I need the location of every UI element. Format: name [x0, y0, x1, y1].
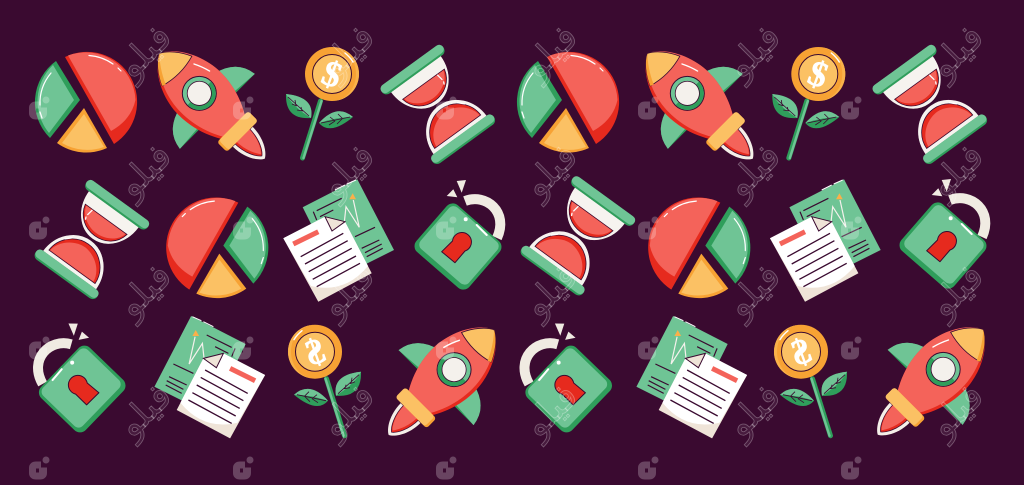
- watermark: repeated wordmark: فيلو: [311, 17, 383, 89]
- icon: documents, row 3: [154, 316, 265, 438]
- icon: coin flower, row 3: [288, 325, 361, 436]
- watermark: repeated wordmark: فيلو: [920, 136, 992, 208]
- watermark: repeated wordmark: فيلو: [920, 256, 992, 328]
- watermark: repeated wordmark: فيلو: [514, 376, 586, 448]
- watermark: repeated wordmark: فيلو: [311, 136, 383, 208]
- icon: hourglass 2, row 2: [518, 174, 637, 298]
- watermark: repeated wordmark: فيلو: [920, 17, 992, 89]
- icon: coin flower, row 1: [286, 47, 359, 158]
- watermark: repeated wordmark: فيلو: [514, 136, 586, 208]
- watermark: repeated logo marks: [32, 96, 862, 476]
- icon: rocket 2, row 3: [840, 292, 1021, 472]
- watermark: repeated wordmark: فيلو: [717, 376, 789, 448]
- watermark: repeated wordmark: فيلو: [108, 136, 180, 208]
- watermark: repeated wordmark: فيلو: [717, 17, 789, 89]
- icon: pie chart, row 2: [166, 197, 268, 298]
- icon: pie chart, row 1: [35, 52, 137, 152]
- icon: pie chart 2, row 2: [648, 197, 750, 298]
- icon: hourglass 2, row 1: [871, 43, 989, 166]
- icon: documents 2, row 3: [636, 316, 747, 438]
- watermark: repeated wordmark: فيلو: [108, 376, 180, 448]
- watermark: repeated wordmark: فيلو: [514, 17, 586, 89]
- icon: hourglass, row 1: [379, 43, 497, 166]
- icon: open padlock, row 3: [30, 319, 133, 439]
- icon: open padlock 2, row 3: [516, 319, 619, 439]
- icon: coin flower 2, row 1: [772, 47, 845, 158]
- watermark: repeated wordmark: فيلو: [717, 136, 789, 208]
- icon: open padlock, row 2: [411, 180, 505, 293]
- watermark: repeated wordmark: فيلو: [311, 376, 383, 448]
- watermark: repeated wordmark: فيلو: [717, 256, 789, 328]
- icon: open padlock 2, row 2: [896, 179, 990, 292]
- icon: hourglass, row 2: [32, 178, 151, 301]
- icon: pie chart 2, row 1: [517, 52, 619, 152]
- watermark: repeated wordmark: فيلو: [514, 256, 586, 328]
- icon: rocket, row 3: [351, 292, 532, 473]
- watermark: repeated wordmark: فيلو: [311, 256, 383, 328]
- icon: documents 2, row 2: [770, 179, 881, 302]
- watermark: repeated wordmark: [108, 17, 992, 448]
- icon: rocket, row 1: [122, 16, 302, 196]
- watermark: repeated wordmark: فيلو: [920, 376, 992, 448]
- icon: documents, row 2: [283, 179, 394, 302]
- icon: coin flower 2, row 3: [774, 325, 847, 436]
- icon: rocket 2, row 1: [610, 16, 790, 196]
- watermark: repeated wordmark: فيلو: [108, 17, 180, 89]
- watermark: repeated wordmark: فيلو: [108, 256, 180, 328]
